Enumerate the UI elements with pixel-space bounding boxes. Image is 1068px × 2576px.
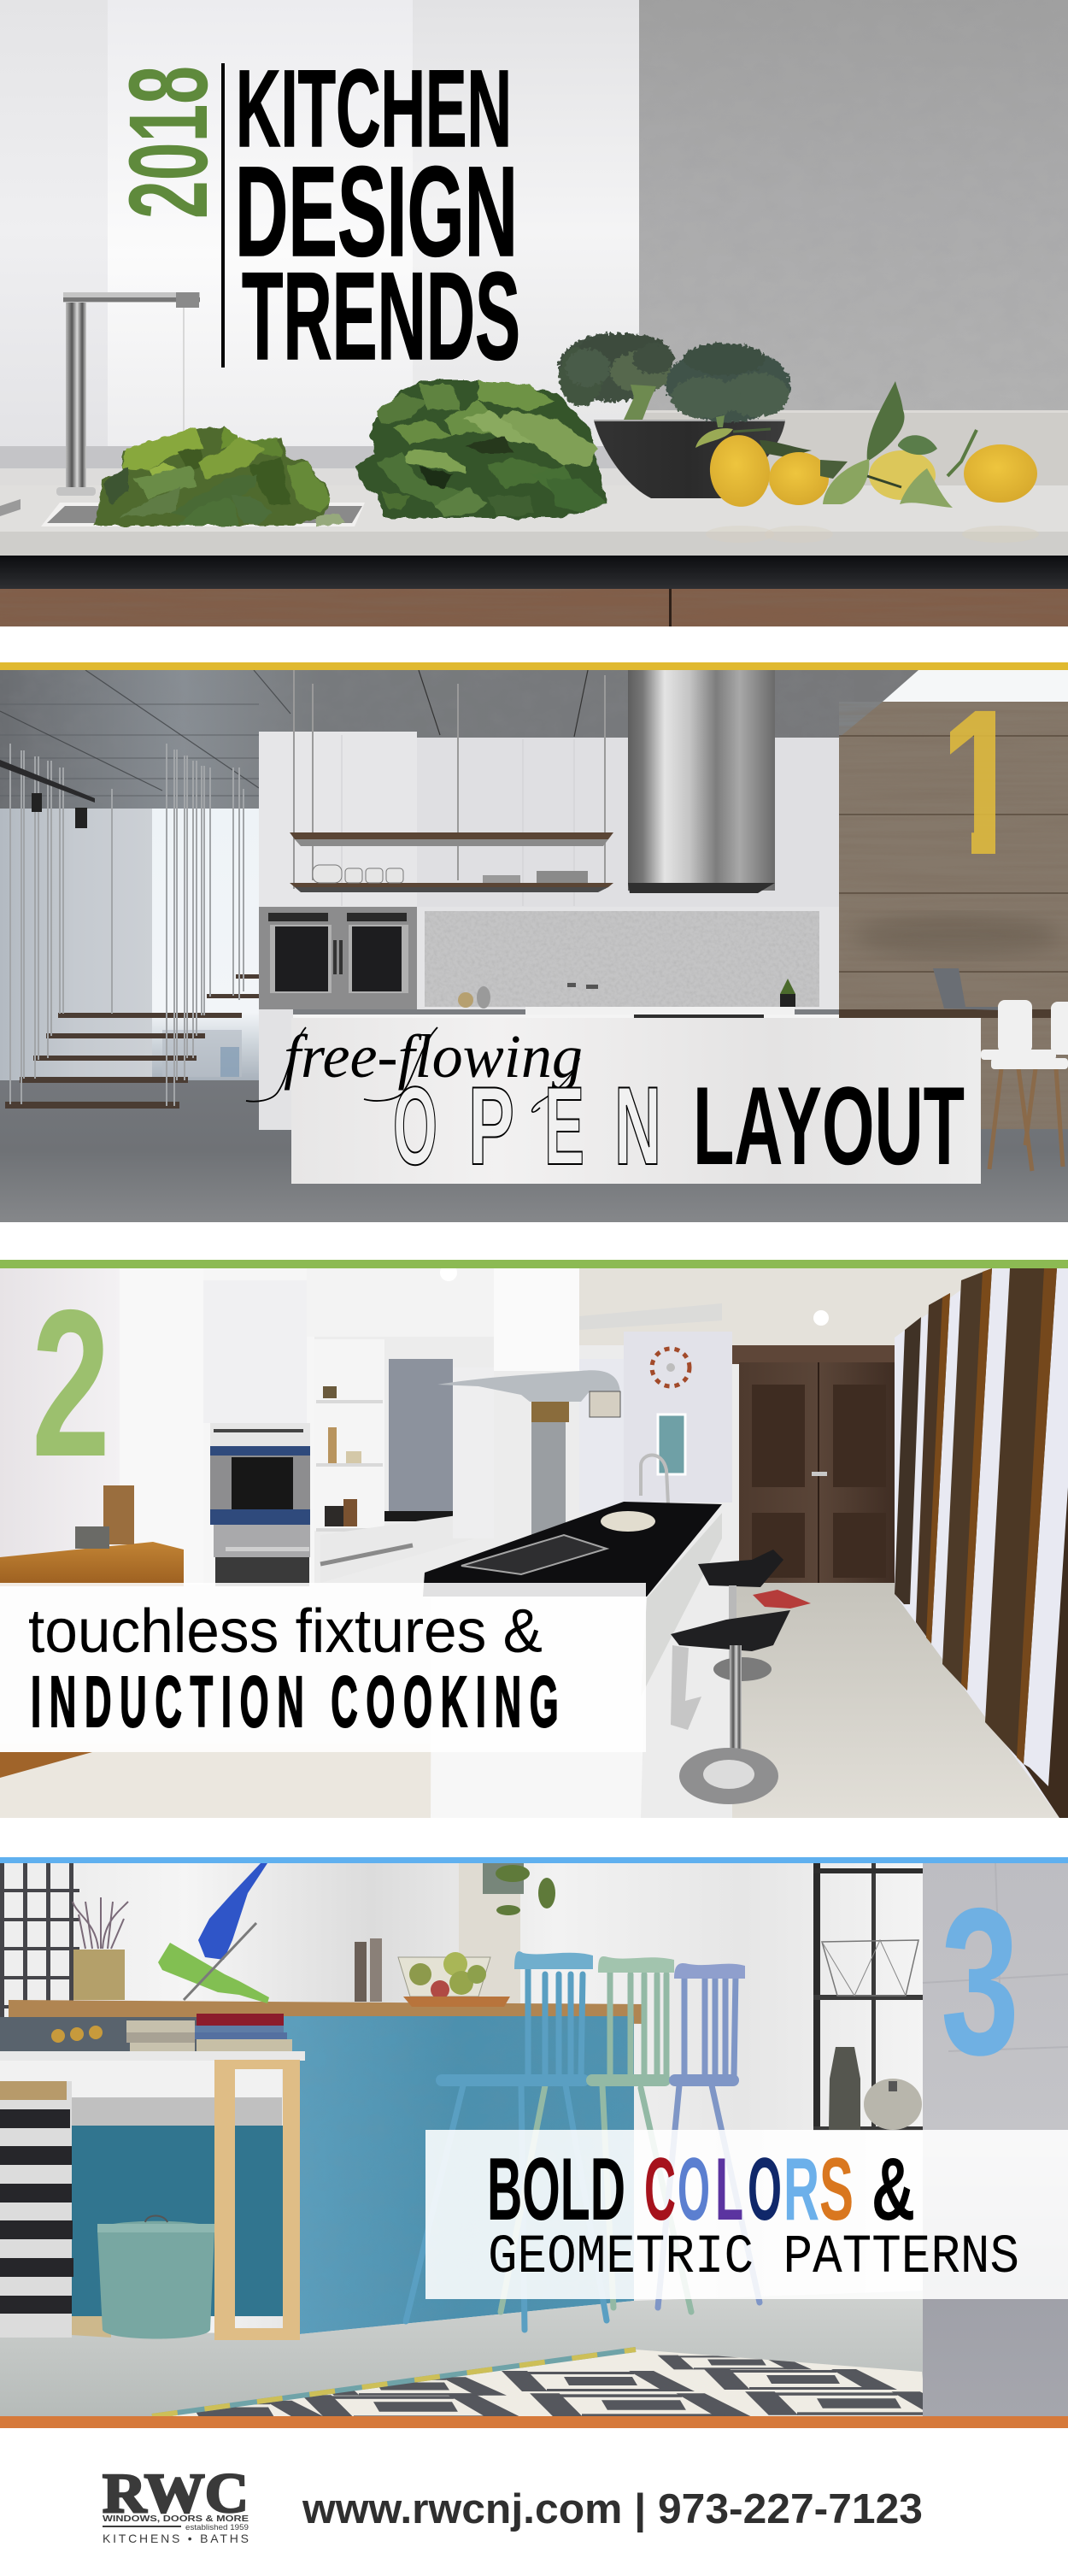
accent bar: blue: [0, 1857, 1068, 1863]
panel: trend 1 open layout: [0, 667, 1068, 1222]
text panel: bold colors and geometric patterns: [425, 2130, 1068, 2299]
logo: RWC windows, doors and more: established 1959: [185, 2523, 249, 2532]
heading: OPEN outlined letters: N: [614, 1063, 661, 1188]
text panel: bold colors and geometric patterns: L: [715, 2140, 743, 2239]
logo: RWC windows, doors and more: KITCHENS • BATHS: [103, 2532, 249, 2545]
text panel: touchless fixtures and induction cooking: INDUCTION COOKING: [31, 1662, 559, 1743]
step number 3: 3: [941, 1864, 1019, 2098]
title: kitchen design trends: TRENDS: [242, 246, 520, 385]
kitchen photo: white kitchen with black island: [0, 1264, 1068, 1818]
kitchen photo: open layout loft: [0, 670, 1068, 1222]
text panel: bold colors and geometric patterns: C: [644, 2140, 676, 2239]
text panel: bold colors and geometric patterns: R: [783, 2140, 819, 2239]
text panel: bold colors and geometric patterns: O: [678, 2140, 710, 2239]
hero photo: counter with greens and lemons: [0, 0, 1068, 626]
text panel: touchless fixtures and induction cooking: [0, 1583, 646, 1752]
panel: hero kitchen scene with title: [0, 0, 1068, 626]
contact line: website and phone: www.rwcnj.com | 973-227-7123: [302, 2486, 923, 2532]
text panel: bold colors and geometric patterns: &: [871, 2140, 915, 2239]
text panel: touchless fixtures and induction cooking: touchless fixtures &: [28, 1597, 543, 1666]
logo: RWC windows, doors and more: WINDOWS, DOORS & MORE: [103, 2514, 249, 2524]
heading: OPEN outlined letters: [393, 1063, 661, 1188]
logo: RWC windows, doors and more: RWC: [103, 2462, 249, 2525]
heading: OPEN outlined letters: P: [468, 1063, 514, 1188]
accent bar: orange: [0, 2416, 1068, 2428]
script heading: free-flowing: [246, 1022, 583, 1112]
script heading: free-flowing: free-flowing: [284, 1022, 583, 1091]
accent bar: green: [0, 1260, 1068, 1268]
accent bar: yellow: [0, 662, 1068, 670]
heading: OPEN outlined letters: E: [544, 1063, 584, 1188]
title: kitchen design trends: DESIGN: [235, 139, 518, 283]
title: kitchen design trends: [235, 48, 520, 385]
text panel: bold colors and geometric patterns: S: [819, 2140, 854, 2239]
step number 1: 1: [936, 667, 1026, 898]
title: kitchen design trends: KITCHEN: [236, 48, 512, 170]
logo: RWC windows, doors and more: [103, 2462, 249, 2545]
step number 2: 2: [32, 1266, 110, 1500]
text panel: bold colors and geometric patterns: BOLD: [487, 2140, 625, 2239]
panel: trend 2 touchless and induction: [0, 1264, 1068, 1818]
panel: trend 3 bold colors and patterns: [0, 1863, 1068, 2423]
text panel: bold colors and geometric patterns: GEOMETRIC PATTERNS: [488, 2227, 1019, 2289]
title divider rule: [221, 63, 225, 368]
heading: OPEN outlined letters: O: [393, 1063, 437, 1188]
kitchen photo: blue island, painted chairs, geometric rug: [0, 1863, 1068, 2423]
text panel: bold colors and geometric patterns: O: [748, 2140, 782, 2239]
